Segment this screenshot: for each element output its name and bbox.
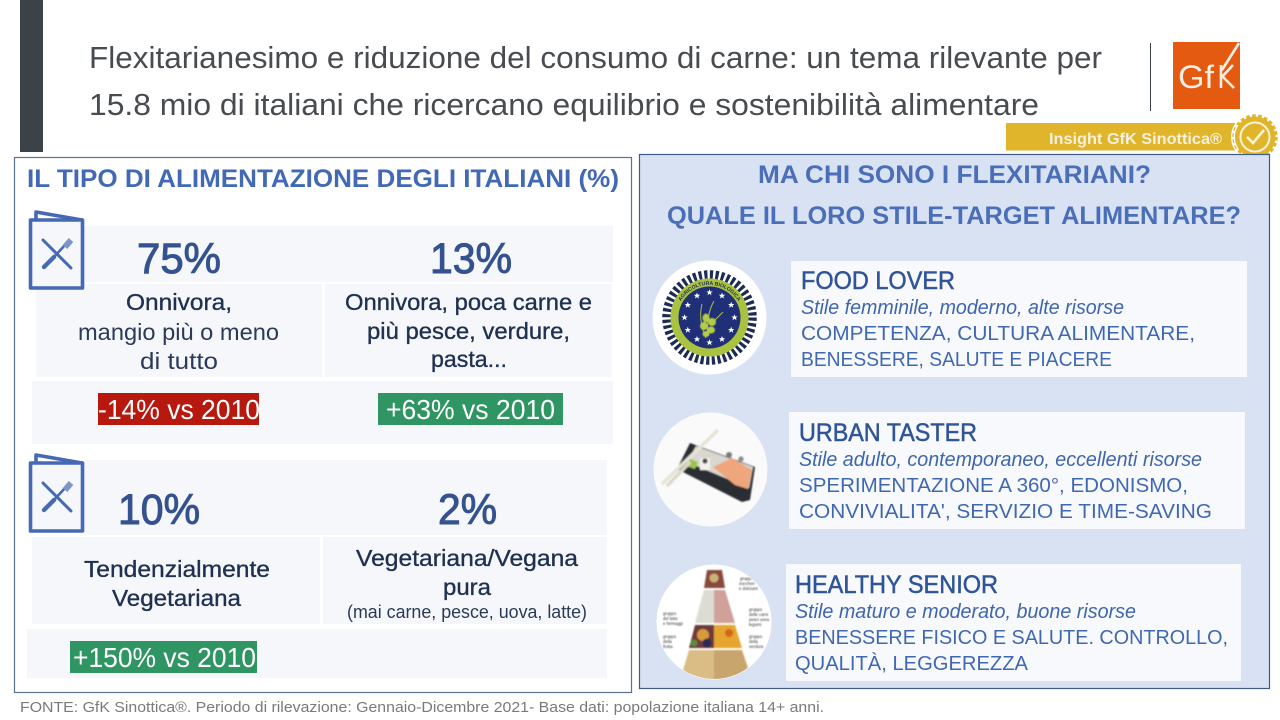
- card: food lover: Stile femminile, moderno, alte risorse: [801, 296, 1124, 319]
- icon: food pyramid: verdura: [749, 644, 764, 649]
- card: healthy senior: HEALTHY SENIOR: [795, 571, 998, 599]
- cells: block 1: [32, 226, 613, 444]
- panel: chi sono i flexitariani: [638, 154, 1270, 690]
- badge: +63%: +63% vs 2010: [386, 394, 555, 425]
- cells: block 2: [27, 460, 607, 678]
- card: food lover: FOOD LOVER: [801, 267, 955, 295]
- icon: food pyramid: della: [749, 639, 759, 644]
- heading: chi sono: [667, 161, 1241, 230]
- card: urban taster: CONVIVIALITA', SERVIZIO E TIME-SAVING: [799, 500, 1212, 523]
- stat: 13% onnivora poca carne: pasta...: [431, 346, 507, 372]
- card: food lover: BENESSERE, SALUTE E PIACERE: [801, 348, 1112, 371]
- card: healthy senior: [786, 564, 1241, 681]
- stat: 13% onnivora poca carne: [345, 235, 592, 372]
- icon: food pyramid: gruppo: [663, 611, 677, 616]
- insight banner: Insight GfK Sinottica®: [1049, 131, 1222, 148]
- heading: chi sono: MA CHI SONO I FLEXITARIANI?: [758, 161, 1151, 189]
- card: urban taster: URBAN TASTER: [799, 419, 977, 447]
- icon: food pyramid: zuccheri: [739, 581, 755, 586]
- icon: food pyramid: della: [663, 639, 673, 644]
- stat: 2% vegetariana vegana: Vegetariana/Vegana: [356, 545, 578, 571]
- heading: tipo di alimentazione: IL TIPO DI ALIMENTAZIONE DEGLI ITALIANI (%): [27, 165, 619, 193]
- stat: 2% vegetariana vegana: pura: [443, 574, 491, 600]
- heading: chi sono: QUALE IL LORO STILE-TARGET ALIMENTARE?: [667, 202, 1241, 230]
- icon: agricoltura biologica: [652, 260, 766, 374]
- logo: GfK: [1173, 42, 1240, 109]
- title: [89, 40, 1102, 122]
- stat: 10% tendenzialmente vegetariana: [84, 486, 270, 611]
- card: healthy senior: BENESSERE FISICO E SALUTE. CONTROLLO,: [795, 626, 1228, 649]
- badge: -14%: -14% vs 2010: [98, 394, 260, 425]
- stat: 75% onnivora: Onnivora,: [126, 289, 232, 315]
- icon: menu 2: [30, 455, 82, 531]
- card: food lover: COMPETENZA, CULTURA ALIMENTARE,: [801, 322, 1195, 345]
- stat: 75% onnivora: 75%: [137, 235, 221, 283]
- icon: food pyramid: legumi: [749, 622, 761, 627]
- accent bar: [20, 0, 43, 152]
- icon: food pyramid: delle carni: [749, 612, 768, 617]
- stat: 2% vegetariana vegana: (mai carne, pesce, uova, latte): [347, 602, 587, 622]
- logo: GfK: Gf: [1178, 59, 1214, 95]
- icon: food pyramid: frutta: [663, 644, 673, 649]
- panel: tipo di alimentazione: [14, 158, 632, 692]
- stat: 10% tendenzialmente vegetariana: 10%: [118, 486, 200, 534]
- stat: 10% tendenzialmente vegetariana: Vegetariana: [112, 585, 241, 611]
- icon: agricoltura biologica: AGRICOLTURA BIOLOGICA: [678, 281, 740, 301]
- card: urban taster: SPERIMENTAZIONE A 360°, EDONISMO,: [799, 474, 1188, 497]
- icon: food pyramid: [656, 564, 772, 680]
- badge: +150%: +150% vs 2010: [73, 642, 256, 673]
- icon: food pyramid: del latte: [663, 616, 678, 621]
- stat: 13% onnivora poca carne: Onnivora, poca carne e: [345, 289, 592, 315]
- icon: seal with check: [1231, 113, 1279, 161]
- icon: food pyramid: gruppo: [740, 576, 754, 581]
- card: urban taster: Stile adulto, contemporaneo, eccellenti risorse: [799, 448, 1202, 471]
- stat: 75% onnivora: mangio più o meno: [78, 319, 279, 345]
- insight banner: [1006, 123, 1240, 150]
- stat: 13% onnivora poca carne: 13%: [430, 235, 512, 283]
- stat: 13% onnivora poca carne: più pesce, verdure,: [367, 318, 570, 344]
- icon: menu 1: [30, 212, 82, 288]
- card: healthy senior: Stile maturo e moderato, buone risorse: [795, 600, 1136, 623]
- stat: 75% onnivora: [78, 235, 279, 374]
- stat: 75% onnivora: di tutto: [140, 348, 218, 374]
- icon: food pyramid: gruppo: [749, 607, 763, 612]
- source note: FONTE: GfK Sinottica®. Periodo di rilevazione: Gennaio-Dicembre 2021- Base dati: popolazione italiana 14+ anni.: [20, 699, 824, 716]
- icon: food pyramid: gruppo: [663, 634, 677, 639]
- card: food lover: [791, 261, 1247, 377]
- icon: sushi tray: [654, 412, 768, 526]
- stat: 2% vegetariana vegana: 2%: [438, 486, 497, 534]
- card: healthy senior: QUALITÀ, LEGGEREZZA: [795, 652, 1028, 675]
- icon: food pyramid: gruppo: [749, 634, 763, 639]
- card: urban taster: [789, 412, 1245, 529]
- title: 15.8 mio di italiani che ricercano equilibrio e sostenibilità alimentare: [89, 87, 1039, 122]
- stat: 10% tendenzialmente vegetariana: Tendenzialmente: [84, 556, 270, 582]
- stat: 2% vegetariana vegana: [347, 486, 587, 622]
- icon: food pyramid: e formaggi: [663, 621, 683, 626]
- icon: food pyramid: pesci uova: [749, 617, 770, 622]
- icon: food pyramid: e dolciumi: [739, 586, 758, 591]
- title: Flexitarianesimo e riduzione del consumo di carne: un tema rilevante per: [89, 40, 1102, 75]
